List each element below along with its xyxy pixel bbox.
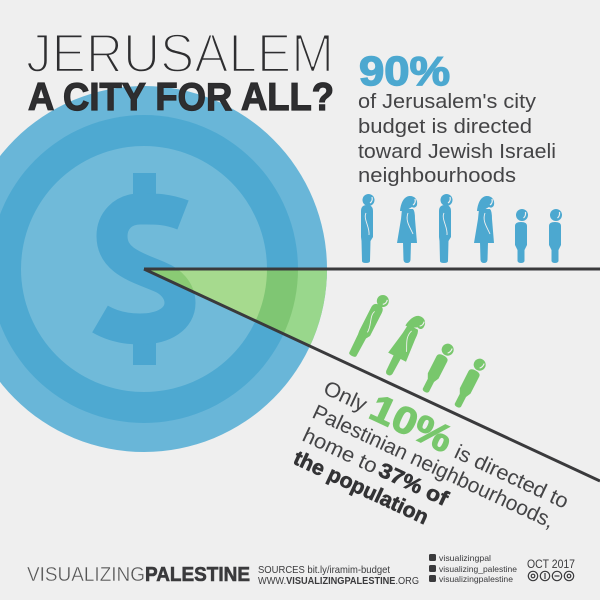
callout: 10 percent: is directed to [451, 441, 572, 514]
footer: sources: SOURCES bit.ly/iramim-budget [258, 564, 390, 576]
green wedge: share of budget [151, 270, 327, 345]
callout: 90 percent: of Jerusalem's city [358, 91, 536, 113]
callout: 10 percent: Only [320, 377, 371, 417]
callout: 10 percent: the population [290, 447, 432, 529]
coin with dollar sign [0, 86, 327, 452]
footer: brand: VISUALIZING [27, 564, 145, 586]
callout: 10 percent: 37% of [375, 459, 453, 511]
footer: date and licence icons: OCT 2017 [527, 559, 575, 571]
icon: dollar sign [100, 173, 183, 365]
icons: blue people [361, 194, 562, 263]
footer: sources [258, 564, 419, 587]
icons: green people [348, 292, 488, 410]
callout: 10 percent: 10% [363, 387, 459, 462]
wedge lines [144, 269, 600, 481]
title: A CITY FOR ALL? [28, 76, 334, 119]
callout: 10 percent: Palestinian neighbourhoods, [309, 401, 558, 533]
footer: social handles: visualizingpal [439, 553, 491, 563]
footer: social handles [429, 553, 517, 584]
title: JERUSALEM [26, 22, 334, 84]
footer: social handles: visualizing_palestine [439, 564, 517, 574]
footer: brand: PALESTINE [145, 564, 250, 586]
callout: 90 percent: budget is directed [358, 116, 532, 138]
footer: sources: WWW.VISUALIZINGPALESTINE.ORG [258, 575, 419, 587]
callout: 90 percent [358, 48, 556, 187]
footer: date and licence icons [527, 559, 575, 581]
callout: 90 percent: neighbourhoods [358, 165, 516, 187]
callout: 90 percent: 90% [359, 48, 450, 94]
callout: 90 percent: toward Jewish Israeli [358, 141, 556, 163]
title [26, 22, 334, 119]
callout: 10 percent: home to [299, 424, 381, 478]
footer: brand [27, 564, 250, 586]
footer: social handles: visualizingpalestine [439, 574, 513, 584]
